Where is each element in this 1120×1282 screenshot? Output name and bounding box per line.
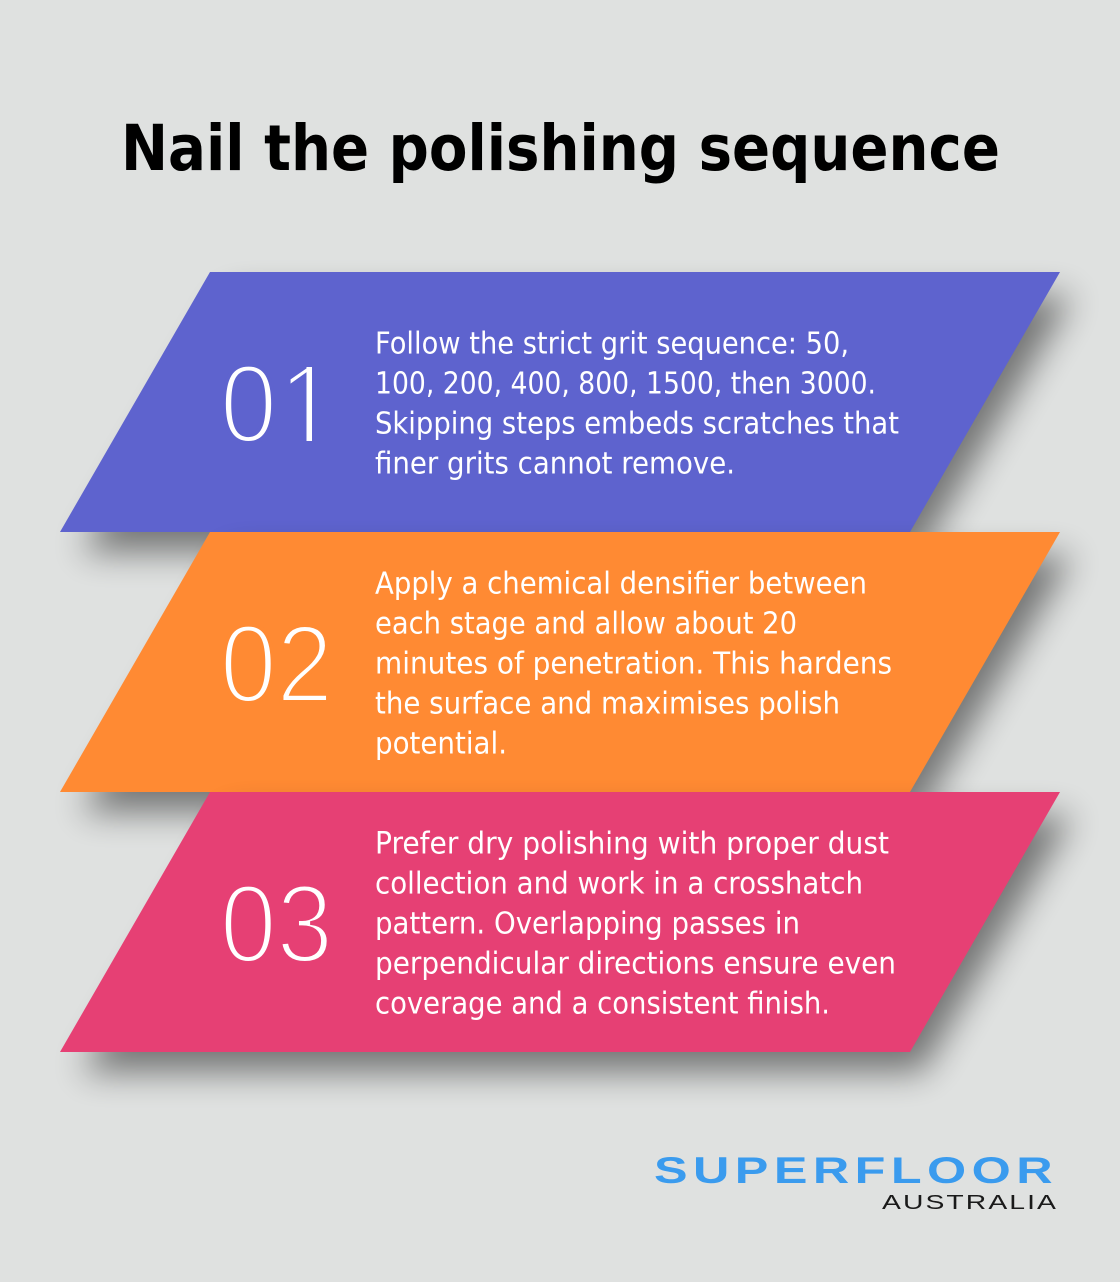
step 03 shape [60, 792, 1060, 1052]
step 03 text: collection and work in a crosshatch [375, 866, 863, 902]
step 01 text: Skipping steps embeds scratches that [375, 406, 899, 442]
title: Nail the polishing sequence [121, 111, 1000, 185]
logo [654, 1150, 1058, 1214]
logo: SUPERFLOOR [654, 1150, 1058, 1191]
step 02 text: potential. [375, 726, 507, 762]
step 02 text: Apply a chemical densifier between [375, 566, 867, 602]
step 02 text: minutes of penetration. This hardens [375, 646, 892, 682]
panel: step 02 [60, 532, 1072, 812]
step 03 text: pattern. Overlapping passes in [375, 906, 800, 942]
step 01 text: 100, 200, 400, 800, 1500, then 3000. [375, 366, 876, 402]
step 02 shape [60, 532, 1060, 792]
logo subtitle: AUSTRALIA [882, 1191, 1058, 1214]
step 02 text [375, 566, 892, 762]
step 01 number: 0 [220, 343, 277, 466]
step 03 text: perpendicular directions ensure even [375, 946, 896, 982]
panel: step 03 [60, 792, 1072, 1072]
step 01 text: Follow the strict grit sequence: 50, [375, 326, 849, 362]
step 03 text: coverage and a consistent finish. [375, 986, 830, 1022]
step 03 text [375, 826, 896, 1022]
step 01 text [375, 326, 899, 482]
step 01 text: finer grits cannot remove. [375, 446, 735, 482]
step 01 number: 1 [278, 343, 339, 466]
step 03 number: 03 [220, 863, 333, 986]
step 02 text: the surface and maximises polish [375, 686, 840, 722]
step 03 text: Prefer dry polishing with proper dust [375, 826, 889, 862]
step 01 shape [60, 272, 1060, 532]
step 02 number: 02 [220, 603, 333, 726]
panel: step 01 [60, 272, 1072, 552]
step 02 text: each stage and allow about 20 [375, 606, 797, 642]
step 01 number [226, 366, 312, 441]
